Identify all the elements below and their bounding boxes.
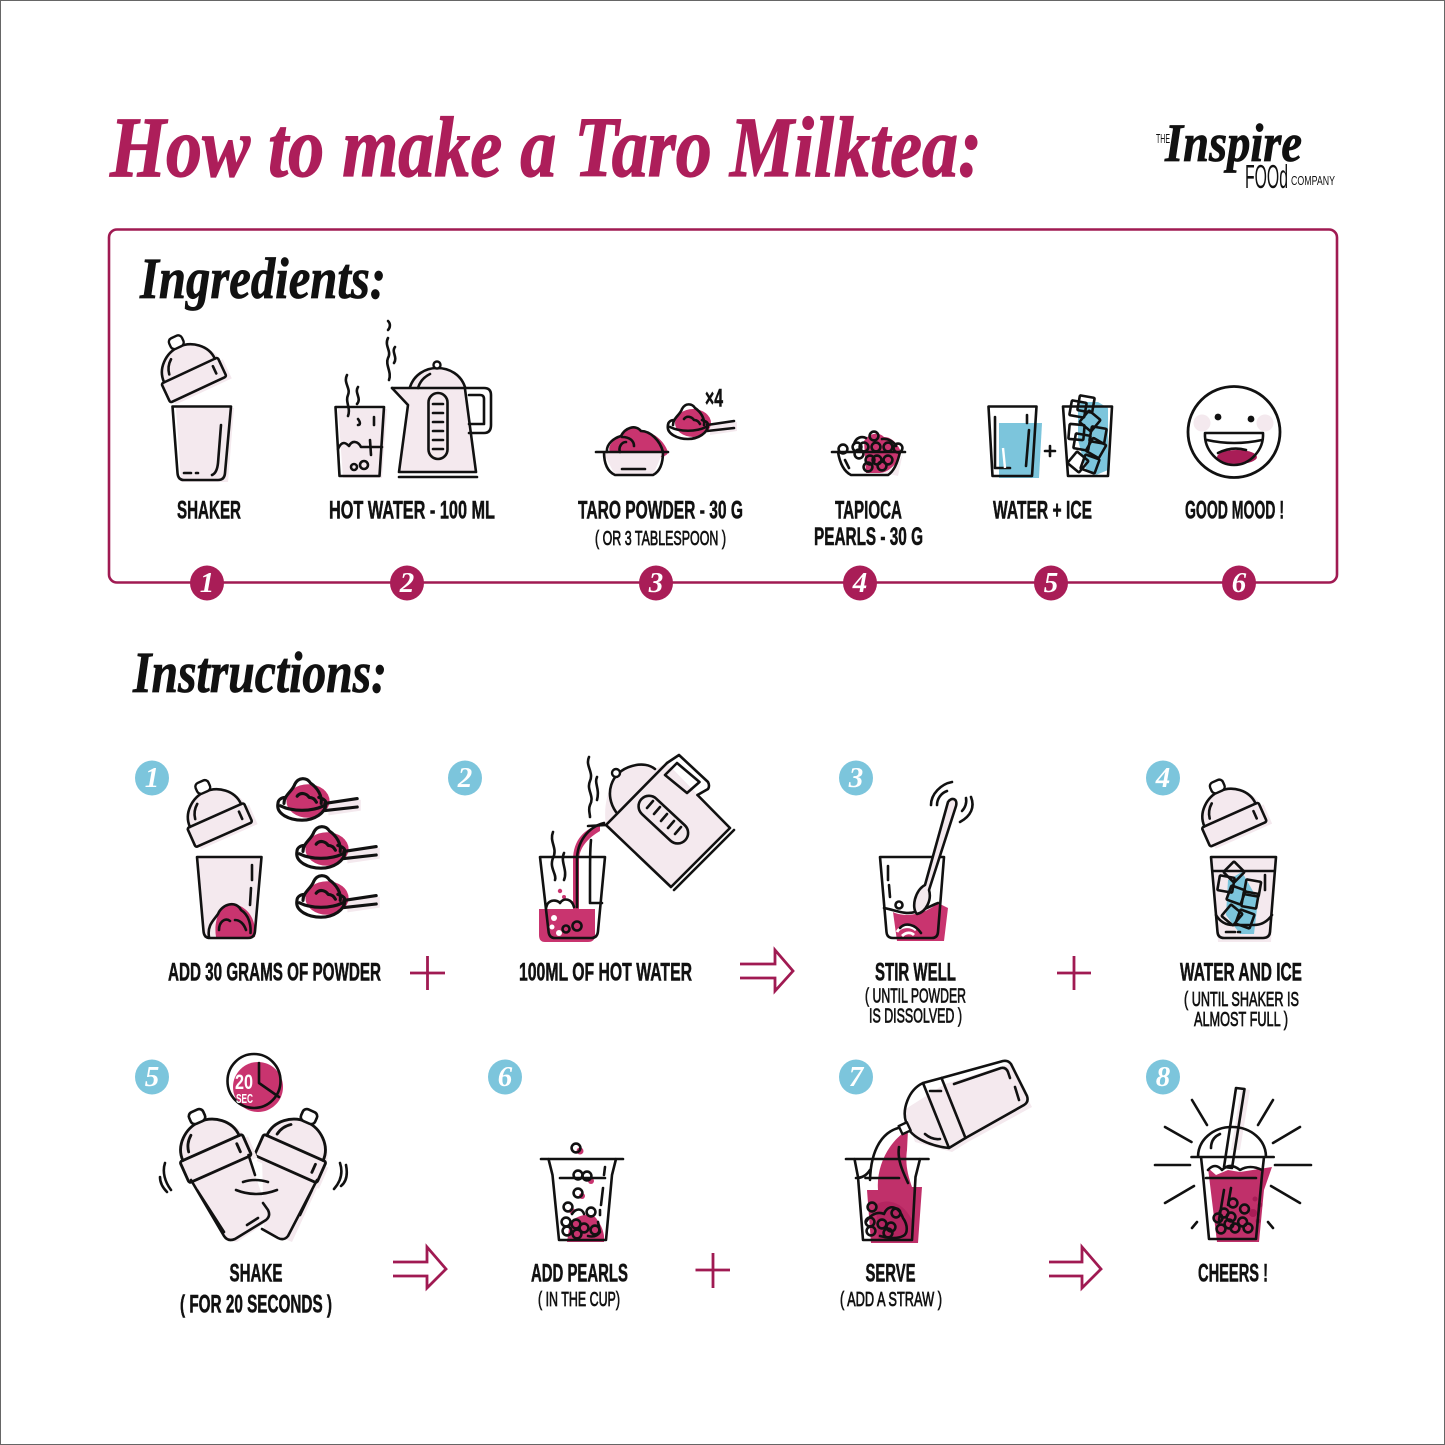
step 4 label <box>1180 958 1302 1031</box>
label: good mood: GOOD MOOD ! <box>1185 496 1284 524</box>
step 7 label: ( ADD A STRAW ) <box>840 1288 942 1311</box>
step 7 label <box>840 1260 942 1311</box>
logo: The Inspire Food Company: COMPANY <box>1291 173 1335 188</box>
title: How to make a Taro Milktea: <box>109 99 982 195</box>
step 3 icon: stirring glass <box>880 782 973 941</box>
ingredient number badges: 2 <box>399 567 414 599</box>
logo: The Inspire Food Company: THE <box>1156 131 1170 146</box>
label: tapioca pearls: PEARLS - 30 G <box>814 523 923 551</box>
logo: The Inspire Food Company <box>1156 113 1335 195</box>
step 3 label <box>865 958 966 1028</box>
step 5 icon: timer: 20 <box>235 1071 253 1094</box>
step 7 label: SERVE <box>866 1260 916 1288</box>
step 8 label: CHEERS ! <box>1198 1260 1268 1288</box>
step 4 badge: 4 <box>1155 762 1170 794</box>
step 6 label: ADD PEARLS <box>531 1260 628 1288</box>
step 4 label: ( UNTIL SHAKER IS <box>1184 988 1299 1011</box>
step 2 badge <box>448 760 482 796</box>
step 5 icon: timer <box>228 1054 283 1112</box>
step 5 label: ( FOR 20 SECONDS ) <box>180 1290 332 1318</box>
step 7 icon: pouring shaker into cup <box>846 1061 1032 1243</box>
icon: smiling face <box>1188 386 1280 478</box>
ingredient number badges: 6 <box>1232 567 1247 599</box>
plus sign <box>410 956 445 990</box>
icon: hot water glass and kettle <box>336 321 491 478</box>
step 8 badge: 8 <box>1156 1061 1171 1093</box>
step 6 label: ( IN THE CUP) <box>538 1288 620 1311</box>
step 3 label: IS DISSOLVED ) <box>869 1004 962 1028</box>
step 1 icon: shaker with powder and spoons <box>172 767 380 938</box>
step 8 icon: bubble tea with rays <box>1155 1088 1311 1242</box>
ingredient number badges: 4 <box>852 567 867 599</box>
icon: water and ice <box>988 395 1112 478</box>
step 6 badge <box>488 1060 522 1094</box>
icon: bowl of taro powder and spoon: ×4 <box>705 384 723 412</box>
step 6 badge: 6 <box>498 1061 513 1093</box>
label: shaker: SHAKER <box>177 496 241 524</box>
label: hot water: HOT WATER - 100 ML <box>329 496 495 524</box>
step 7 badge <box>839 1060 873 1094</box>
label: water and ice: WATER + ICE <box>993 496 1092 524</box>
step 5 label: SHAKE <box>230 1260 282 1288</box>
ingredient number badges: 3 <box>648 567 663 599</box>
step 4 icon: shaker with water and ice <box>1187 767 1276 942</box>
step 2 badge: 2 <box>457 762 472 794</box>
label: tapioca pearls: TAPIOCA <box>835 496 902 524</box>
step 1 badge <box>135 760 169 796</box>
step 5 badge: 5 <box>145 1061 159 1093</box>
ingredient number badges: 5 <box>1044 567 1058 599</box>
panel: ingredients <box>109 230 1337 600</box>
label: taro powder <box>578 496 743 550</box>
step 1 badge: 1 <box>145 762 159 794</box>
plus sign <box>1057 956 1091 990</box>
step 4 label: WATER AND ICE <box>1180 958 1302 986</box>
icon: shaker <box>146 322 234 482</box>
arrow <box>1049 1247 1101 1288</box>
step 6 icon: cup with pearls <box>541 1144 623 1242</box>
label: tapioca pearls <box>814 496 923 551</box>
label: taro powder: ( OR 3 TABLESPOON ) <box>595 527 726 550</box>
step 7 badge: 7 <box>849 1061 865 1093</box>
step 3 badge <box>839 760 873 796</box>
step 5 icon: shaking shakers <box>160 1095 347 1242</box>
step 3 label: STIR WELL <box>875 958 956 986</box>
step 5 icon: timer: SEC <box>236 1091 253 1106</box>
step 6 label <box>531 1260 628 1311</box>
heading: Ingredients: Ingredients: <box>139 246 386 311</box>
icon: bowl of taro powder and spoon <box>596 384 737 475</box>
label: taro powder: TARO POWDER - 30 G <box>578 496 743 524</box>
step 5 badge <box>135 1060 169 1094</box>
arrow <box>393 1247 446 1288</box>
plus sign <box>696 1253 730 1288</box>
logo: The Inspire Food Company: FOOd <box>1245 158 1288 195</box>
step 3 label: ( UNTIL POWDER <box>865 984 966 1008</box>
step 1 label: ADD 30 GRAMS OF POWDER <box>168 958 381 986</box>
step 2 icon: pouring kettle and glass <box>539 755 734 942</box>
step 5 label <box>180 1260 332 1318</box>
arrow <box>740 950 793 991</box>
heading: Instructions: Instructions: <box>132 640 387 705</box>
ingredient number badges <box>190 566 1256 600</box>
step 2 label: 100ML OF HOT WATER <box>519 958 692 986</box>
step 3 badge: 3 <box>848 762 863 794</box>
step 4 badge <box>1146 760 1180 796</box>
icon: bowl of tapioca pearls <box>832 432 905 476</box>
step 4 label: ALMOST FULL ) <box>1194 1008 1288 1031</box>
step 8 badge <box>1146 1060 1180 1094</box>
ingredient number badges: 1 <box>200 567 214 599</box>
logo: The Inspire Food Company: Inspire <box>1164 113 1302 173</box>
